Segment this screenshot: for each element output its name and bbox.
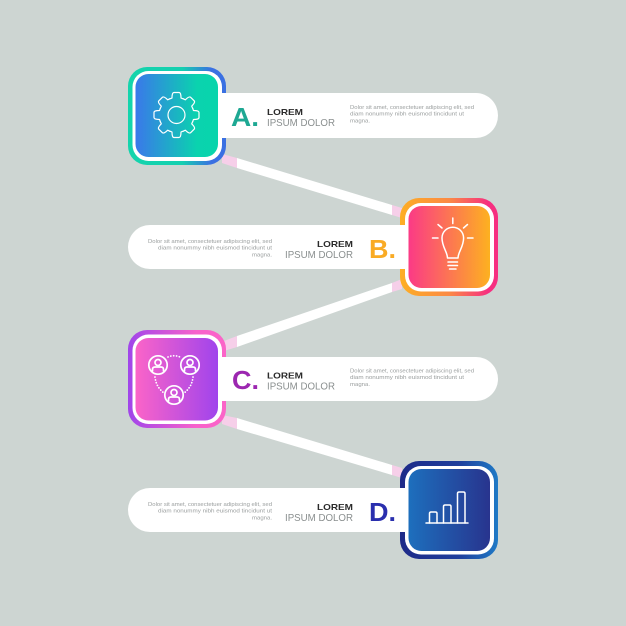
description C: diam nonummy nibh euismod tincidunt ut [350,375,464,381]
step D [128,461,498,559]
icon: light bulb [432,218,473,269]
letter C: C. [232,365,259,395]
description B: Dolor sit amet, consectetuer adipiscing elit, sed [148,239,272,245]
step A [128,67,498,165]
description C [350,368,474,388]
heading C: LOREM [267,370,303,380]
connector A to B [222,154,402,218]
description D: diam nonummy nibh euismod tincidunt ut [158,509,272,515]
heading D: IPSUM DOLOR [285,513,353,524]
description D: Dolor sit amet, consectetuer adipiscing elit, sed [148,502,272,508]
description B: magna. [252,252,272,258]
label bar A [218,93,498,138]
label bar D [128,488,409,532]
description D [148,502,272,521]
heading D: LOREM [317,502,353,512]
heading C [267,370,335,392]
heading B [285,239,353,261]
connector B to C [224,279,402,351]
label bar B [128,225,409,269]
icon: connected people [149,356,199,404]
card B icon tile [408,206,490,288]
heading A [267,107,335,129]
description A [350,105,474,124]
step B [128,198,498,296]
description A: Dolor sit amet, consectetuer adipiscing elit, sed [350,105,474,111]
card D icon tile [408,469,490,551]
card C icon tile [128,330,226,428]
letter D: D. [369,497,396,527]
icon: bar chart [426,492,468,523]
card D frame [400,461,498,559]
description D: magna. [252,515,272,521]
heading A: IPSUM DOLOR [267,118,335,129]
step C [128,330,498,428]
description B: diam nonummy nibh euismod tincidunt ut [158,246,272,252]
description A: magna. [350,118,370,124]
card B frame [400,198,498,296]
description A: diam nonummy nibh euismod tincidunt ut [350,112,464,118]
heading C: IPSUM DOLOR [267,382,335,392]
card A icon tile [128,67,226,165]
connector C to D [222,415,402,478]
heading D [285,502,353,524]
description C: Dolor sit amet, consectetuer adipiscing elit, sed [350,368,474,374]
heading A: LOREM [267,107,303,117]
heading B: IPSUM DOLOR [285,250,353,261]
heading B: LOREM [317,239,353,249]
letter B: B. [369,234,396,264]
label bar C [218,357,498,401]
description C: magna. [350,382,370,388]
icon: gear [154,92,199,138]
letter A: A. [231,102,259,132]
description B [148,239,272,258]
